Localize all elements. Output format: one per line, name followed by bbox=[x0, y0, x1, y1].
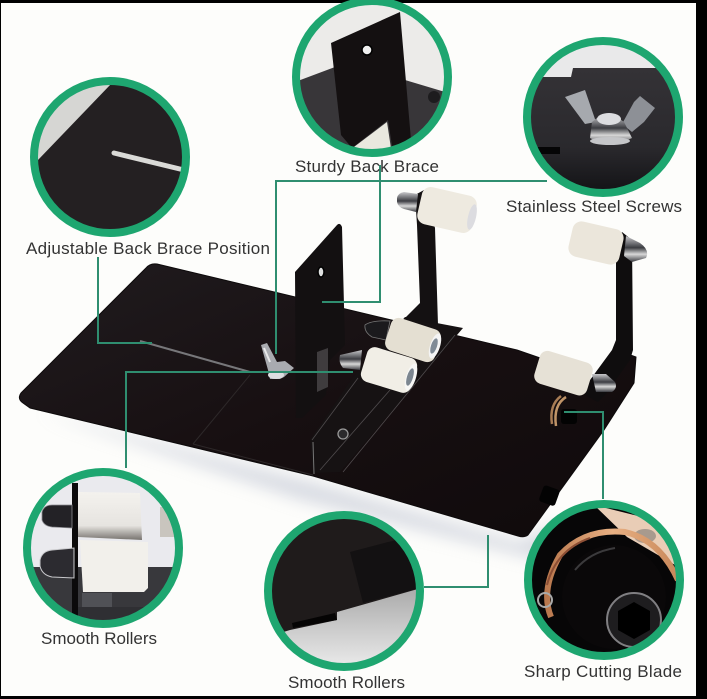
detail photo: rollers bbox=[31, 476, 175, 620]
label: Sharp Cutting Blade bbox=[524, 662, 682, 681]
leader lines bbox=[98, 165, 603, 587]
green ring bbox=[527, 41, 679, 193]
callout: sturdy back brace bbox=[292, 0, 455, 176]
leader: smooth rollers center bbox=[424, 535, 488, 587]
board seam bbox=[193, 375, 313, 475]
chrome cap nuts bbox=[339, 192, 647, 392]
wing nut bbox=[261, 343, 294, 379]
green ring bbox=[296, 1, 448, 153]
callout: smooth rollers left bbox=[22, 468, 187, 648]
back brace plate bbox=[295, 224, 345, 418]
leader: sharp cutting blade bbox=[564, 412, 603, 499]
detail photo: blade bbox=[532, 508, 676, 652]
label: Stainless Steel Screws bbox=[506, 197, 682, 216]
callout: smooth rollers center bbox=[264, 511, 425, 692]
green ring bbox=[27, 472, 179, 624]
callout: sharp cutting blade bbox=[524, 500, 690, 681]
leader: sturdy back brace bbox=[322, 165, 380, 302]
label: Sturdy Back Brace bbox=[295, 157, 439, 176]
angle plate bbox=[310, 317, 463, 473]
copper blade on board bbox=[551, 396, 566, 426]
detail photo: wing nut bbox=[531, 45, 675, 189]
label: Adjustable Back Brace Position bbox=[26, 239, 270, 258]
white rollers bbox=[359, 185, 625, 397]
center arm bbox=[405, 190, 438, 325]
detail photo: board corner bbox=[272, 519, 416, 663]
leader: stainless steel screws bbox=[276, 181, 547, 354]
board slot bbox=[140, 341, 250, 372]
label: Smooth Rollers bbox=[41, 629, 157, 648]
flange bolts bbox=[538, 409, 577, 507]
leader: smooth rollers left bbox=[126, 372, 353, 468]
product: bottle cutter jig bbox=[19, 185, 647, 560]
detail photo: brace bbox=[300, 5, 444, 149]
hex bolt bbox=[338, 429, 348, 439]
callout: stainless steel screws bbox=[506, 37, 690, 216]
label: Smooth Rollers bbox=[288, 673, 405, 692]
green ring bbox=[268, 515, 420, 667]
callout: adjustable back brace position bbox=[26, 70, 270, 258]
right arm bbox=[585, 232, 633, 402]
green ring bbox=[34, 81, 186, 233]
base board bbox=[19, 264, 636, 537]
green ring bbox=[528, 504, 680, 656]
leader: adjustable back brace bbox=[98, 257, 152, 343]
detail photo: slot bbox=[38, 85, 182, 229]
base shadow bbox=[40, 412, 560, 560]
